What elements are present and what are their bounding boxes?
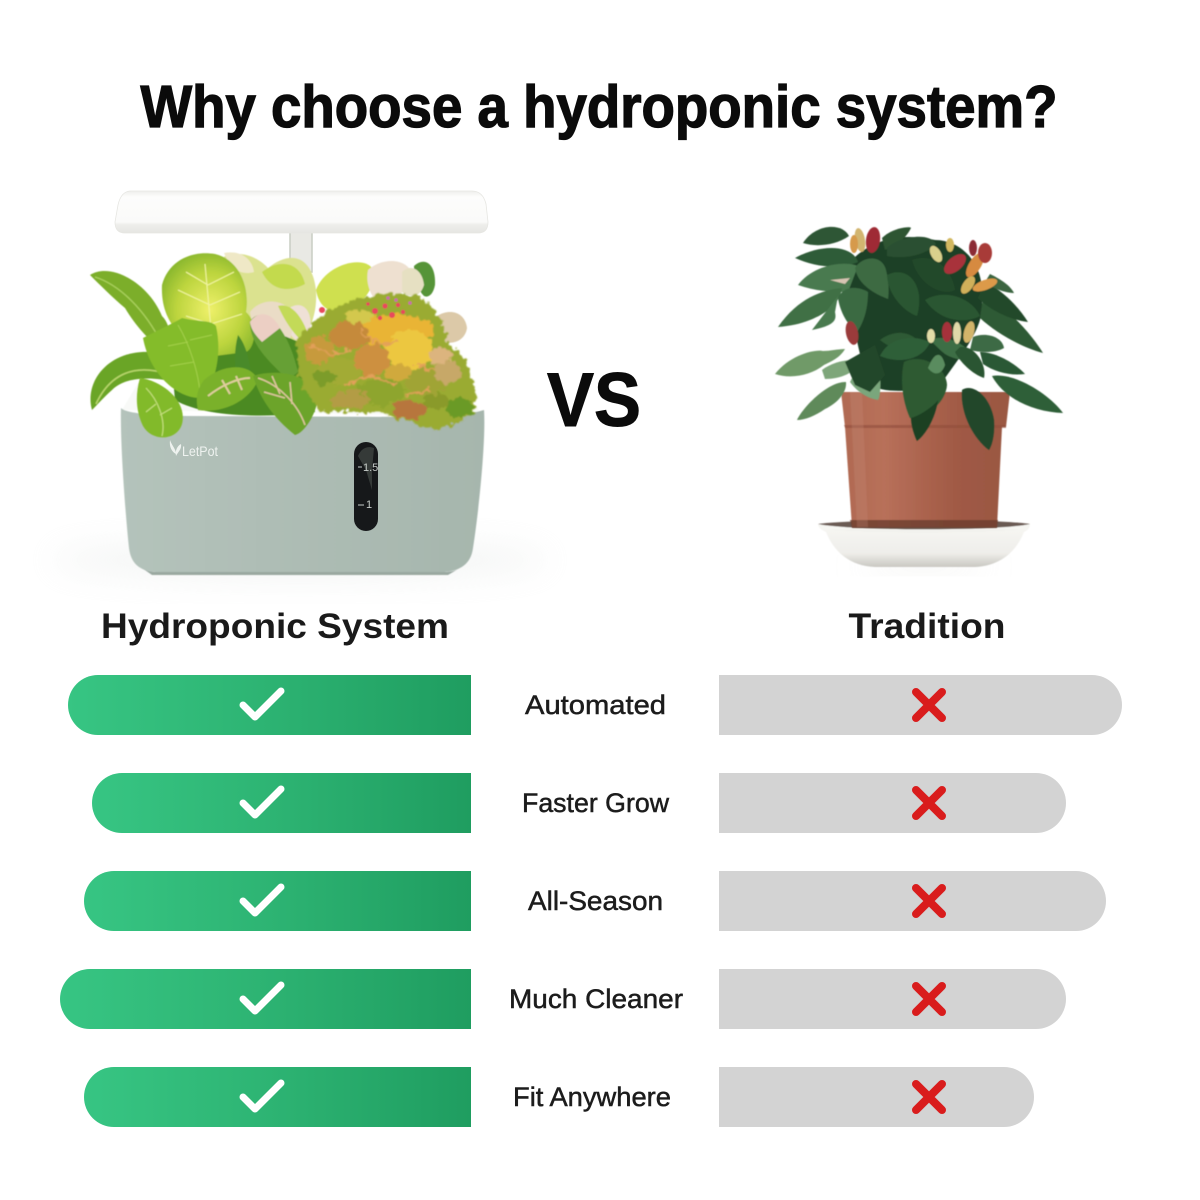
cross icon: [916, 888, 942, 914]
planter floor shadow: [50, 540, 550, 580]
lower pink-veined leaf right: [253, 373, 318, 435]
check icon: [243, 1083, 281, 1109]
cross icon: [916, 1084, 942, 1110]
grey bar: [719, 773, 1066, 833]
plants: [90, 252, 476, 437]
planter logo: [170, 440, 218, 459]
water level window: 1.5: [363, 462, 378, 474]
cross icon: [916, 986, 942, 1012]
lamp head: [115, 191, 488, 233]
right long leaves: [970, 274, 1063, 413]
centre leaves: [838, 258, 980, 350]
heading: Tradition: Tradition: [848, 607, 1006, 646]
saucer: [818, 520, 1030, 571]
label: Much Cleaner: [509, 984, 683, 1014]
check icon: [243, 985, 281, 1011]
planter logo: LetPot: [182, 443, 218, 459]
planter tub: [121, 383, 484, 575]
lower pink-veined leaf left: [197, 367, 258, 411]
peppers: [830, 226, 999, 346]
row: Automated: [68, 675, 1122, 735]
check icon: [243, 691, 281, 717]
grey bar: [719, 675, 1122, 735]
row: Much Cleaner: [60, 969, 1066, 1029]
heading: Hydroponic System: Hydroponic System: [101, 607, 449, 646]
dark foliage core: [849, 237, 982, 391]
row: All-Season: [84, 871, 1106, 931]
green bar: [84, 871, 471, 931]
frilly lettuce mass: [297, 294, 476, 429]
pink speckles on lettuce: [319, 296, 412, 320]
terracotta pot: [841, 392, 1010, 528]
grey bar: [719, 969, 1066, 1029]
row: Fit Anywhere: [84, 1067, 1034, 1127]
green bar: [68, 675, 471, 735]
grey bar: [719, 871, 1106, 931]
green bar: [84, 1067, 471, 1127]
VS label: VS: [547, 358, 641, 443]
illustration: traditional potted plant: [775, 226, 1063, 571]
cross icon: [916, 692, 942, 718]
grey bar: [719, 1067, 1034, 1127]
check icon: [243, 887, 281, 913]
far left leaf: [90, 271, 170, 352]
green bar: [60, 969, 471, 1029]
label: Automated: [525, 690, 666, 720]
background pale cabbage leaves: [222, 252, 467, 352]
centre stalk leaves: [250, 315, 298, 380]
lower left leaves: [775, 345, 885, 420]
pepper plant foliage: [775, 226, 1063, 450]
water level window: 1: [366, 499, 372, 511]
lower-left long leaf: [90, 352, 174, 410]
cross icon: [916, 790, 942, 816]
front lower leaves: [880, 338, 994, 450]
dark gaps behind foliage: [170, 326, 315, 416]
green bar: [92, 773, 471, 833]
label: All-Season: [528, 886, 663, 916]
illustration: hydroponic planter: [50, 191, 550, 580]
centre-left leaf: [143, 318, 218, 398]
label: Fit Anywhere: [513, 1082, 671, 1112]
title: Why choose a hydroponic system?: [141, 75, 1057, 141]
label: Faster Grow: [522, 788, 669, 818]
bottom-left rounded leaf: [137, 378, 183, 437]
check icon: [243, 789, 281, 815]
row: Faster Grow: [92, 773, 1066, 833]
lamp stem: [290, 232, 312, 272]
water level window: [354, 442, 378, 531]
big bright round leaf: [162, 253, 254, 356]
top-left leaves: [778, 227, 936, 330]
